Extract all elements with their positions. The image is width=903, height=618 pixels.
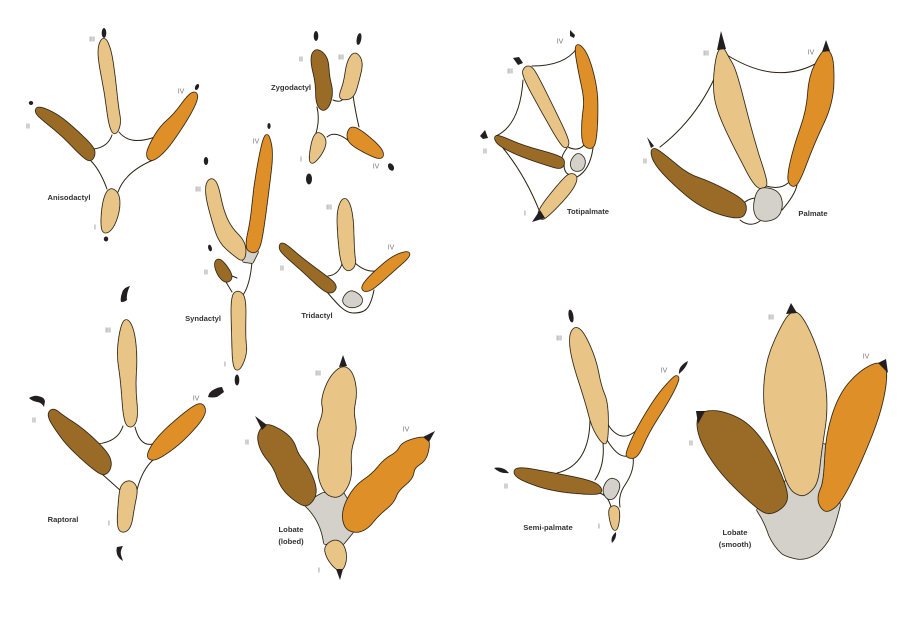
digit labels: IV xyxy=(388,244,395,252)
digit labels: IV xyxy=(193,396,200,402)
webbing lines xyxy=(496,48,593,210)
caption: Tridactyl xyxy=(301,311,333,320)
panel: syndactyl foot xyxy=(185,123,271,386)
digit labels: II xyxy=(280,266,284,272)
webbing lines xyxy=(557,418,637,507)
claws xyxy=(647,31,830,148)
digit labels: III xyxy=(89,36,95,44)
digit labels: IV xyxy=(178,88,185,96)
digit labels xyxy=(643,50,815,166)
panel: lobate (smooth) foot xyxy=(689,303,888,558)
claws xyxy=(29,286,224,561)
claws xyxy=(29,28,200,242)
digit labels: II xyxy=(32,418,36,424)
claws xyxy=(204,123,271,386)
panel: palmate foot xyxy=(643,31,833,224)
digit labels: II xyxy=(483,148,487,156)
digit labels: IV xyxy=(863,354,870,360)
caption line 2: (smooth) xyxy=(719,540,752,549)
panel: zygodactyl foot xyxy=(271,31,395,184)
digit labels: II xyxy=(26,124,30,130)
toes xyxy=(50,321,204,531)
digit labels: III xyxy=(768,314,774,322)
digit labels xyxy=(504,336,668,530)
caption: Lobate xyxy=(279,525,303,534)
digit labels: II xyxy=(204,270,208,276)
digit labels: I xyxy=(300,156,302,164)
digit labels: I xyxy=(524,210,526,218)
toes xyxy=(698,313,885,512)
caption line 2: (lobed) xyxy=(278,537,304,546)
claws xyxy=(494,309,688,543)
toes xyxy=(496,46,596,218)
digit labels xyxy=(299,54,380,170)
webbing lines xyxy=(226,262,252,295)
digit labels xyxy=(26,36,185,232)
digit labels xyxy=(280,204,395,272)
webbing lines xyxy=(316,95,359,141)
grey foot pad xyxy=(344,292,361,306)
digit labels xyxy=(483,38,564,218)
digit labels: I xyxy=(94,224,96,232)
digit labels: IV xyxy=(808,50,815,56)
claws xyxy=(306,31,395,184)
claws xyxy=(480,30,575,222)
panel: semi-palmate foot xyxy=(494,309,688,543)
digit labels: II xyxy=(643,158,647,166)
digit labels: III xyxy=(703,50,709,58)
toes xyxy=(259,368,428,569)
caption: Totipalmate xyxy=(567,207,609,216)
digit labels: II xyxy=(299,56,303,64)
digit labels: I xyxy=(108,520,110,528)
digit labels: IV xyxy=(373,164,380,170)
grey foot pad xyxy=(572,155,584,170)
panel: raptoral foot xyxy=(29,286,224,561)
digit labels: I xyxy=(598,524,600,530)
digit labels: III xyxy=(556,336,562,342)
digit labels: IV xyxy=(557,38,564,46)
caption: Semi-palmate xyxy=(523,523,573,532)
panel: lobate (lobed) foot xyxy=(245,355,435,580)
grey web xyxy=(306,494,352,543)
webbing lines xyxy=(97,426,153,491)
digit labels: II xyxy=(504,484,508,490)
caption: Lobate xyxy=(723,528,747,537)
toes xyxy=(207,136,271,369)
digit labels: I xyxy=(224,362,226,368)
digit labels: III xyxy=(326,204,332,212)
digit labels: III xyxy=(105,328,111,334)
grey foot pad xyxy=(755,189,781,220)
digit labels xyxy=(195,138,260,368)
digit labels: III xyxy=(507,68,513,76)
toes xyxy=(515,329,678,529)
digit labels: II xyxy=(689,440,693,448)
caption: Palmate xyxy=(798,209,828,218)
panel: tridactyl foot xyxy=(280,200,409,320)
caption: Raptoral xyxy=(48,515,78,524)
digit labels: IV xyxy=(661,368,668,374)
toes xyxy=(37,40,196,232)
toes xyxy=(652,50,833,217)
webbing lines xyxy=(91,132,155,192)
claws xyxy=(255,355,435,580)
digit labels: III xyxy=(315,370,321,378)
caption: Zygodactyl xyxy=(271,83,311,92)
panel: totipalmate foot xyxy=(480,30,609,222)
panel: anisodactyl foot xyxy=(26,28,200,242)
digit labels: III xyxy=(338,54,344,62)
toes xyxy=(311,51,382,162)
grey web xyxy=(758,445,839,558)
digit labels xyxy=(32,328,200,528)
caption: Syndactyl xyxy=(185,314,221,323)
claws xyxy=(696,303,888,424)
webbing lines xyxy=(327,263,375,313)
toes xyxy=(281,200,409,292)
digit labels xyxy=(689,314,870,448)
digit labels: IV xyxy=(253,138,260,146)
digit labels: III xyxy=(195,186,201,194)
digit labels xyxy=(245,370,410,574)
digit labels: I xyxy=(318,568,320,574)
digit labels: IV xyxy=(403,426,410,434)
digit labels: II xyxy=(245,440,249,446)
webbing lines xyxy=(660,55,815,224)
grey foot pad xyxy=(604,480,618,498)
caption: Anisodactyl xyxy=(47,193,91,202)
